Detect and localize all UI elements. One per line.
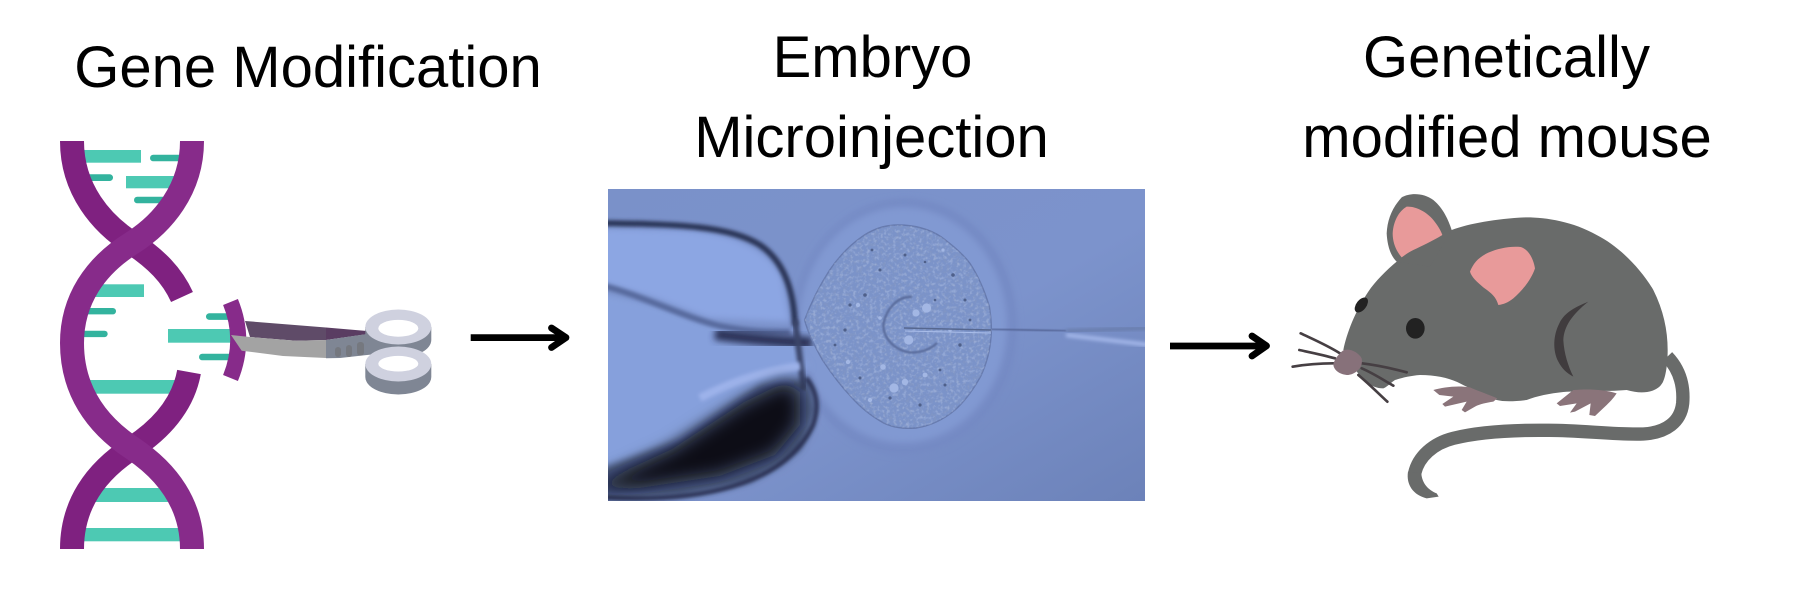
heading: gene modification: Gene Modification	[74, 35, 542, 100]
photo: embryo cell	[800, 220, 995, 432]
panel: genetically modified mouse	[1293, 25, 1712, 498]
mouse eye	[1406, 318, 1425, 339]
icon: mouse illustration	[1293, 194, 1683, 498]
heading: embryo microinjection: Microinjection	[694, 105, 1049, 170]
arrow: microinjection to mouse	[1170, 336, 1266, 356]
icon: cut DNA fragment	[230, 302, 238, 378]
photo: injection needle trace	[990, 328, 1150, 345]
mouse whiskers	[1293, 333, 1407, 402]
mouse ear back	[1387, 194, 1452, 267]
icon: teal DNA base pairs	[76, 150, 232, 541]
heading: genetically modified mouse	[1302, 25, 1712, 170]
arrow: gene modification to microinjection	[471, 328, 566, 348]
photo: embryo held by pipette with injection needle	[596, 189, 1150, 501]
mouse front ear	[1470, 247, 1535, 305]
photo: holding pipette upper lumen	[596, 228, 790, 322]
icon: scissors	[231, 310, 431, 395]
heading: embryo microinjection	[694, 25, 1049, 170]
mouse far eye	[1352, 295, 1371, 315]
photo: dark pipette wedge	[596, 382, 800, 490]
icon: DNA back strand	[72, 141, 189, 549]
icon: DNA front strand	[72, 141, 192, 549]
photo: lower area behind holding pipette	[608, 294, 806, 465]
heading: genetically modified mouse: modified mouse	[1302, 105, 1712, 170]
photo: pipette edges	[596, 223, 817, 498]
photo: lower pipette body under wedge	[596, 378, 816, 496]
mouse inner ear	[1393, 207, 1442, 257]
mouse back foot	[1557, 389, 1617, 416]
mouse tail	[1408, 357, 1683, 498]
panel: embryo microinjection	[596, 25, 1150, 501]
infographic: gene modification to mouse workflow	[60, 34, 1710, 549]
mouse body	[1343, 217, 1668, 401]
mouse hip line	[1554, 302, 1588, 377]
panel: gene modification	[72, 35, 542, 549]
heading: genetically modified mouse: Genetically	[1363, 25, 1650, 90]
heading: embryo microinjection: Embryo	[773, 25, 972, 90]
mouse front foot	[1433, 387, 1497, 412]
photo: zona pellucida halo	[854, 336, 1000, 440]
mouse nose	[1333, 350, 1362, 375]
